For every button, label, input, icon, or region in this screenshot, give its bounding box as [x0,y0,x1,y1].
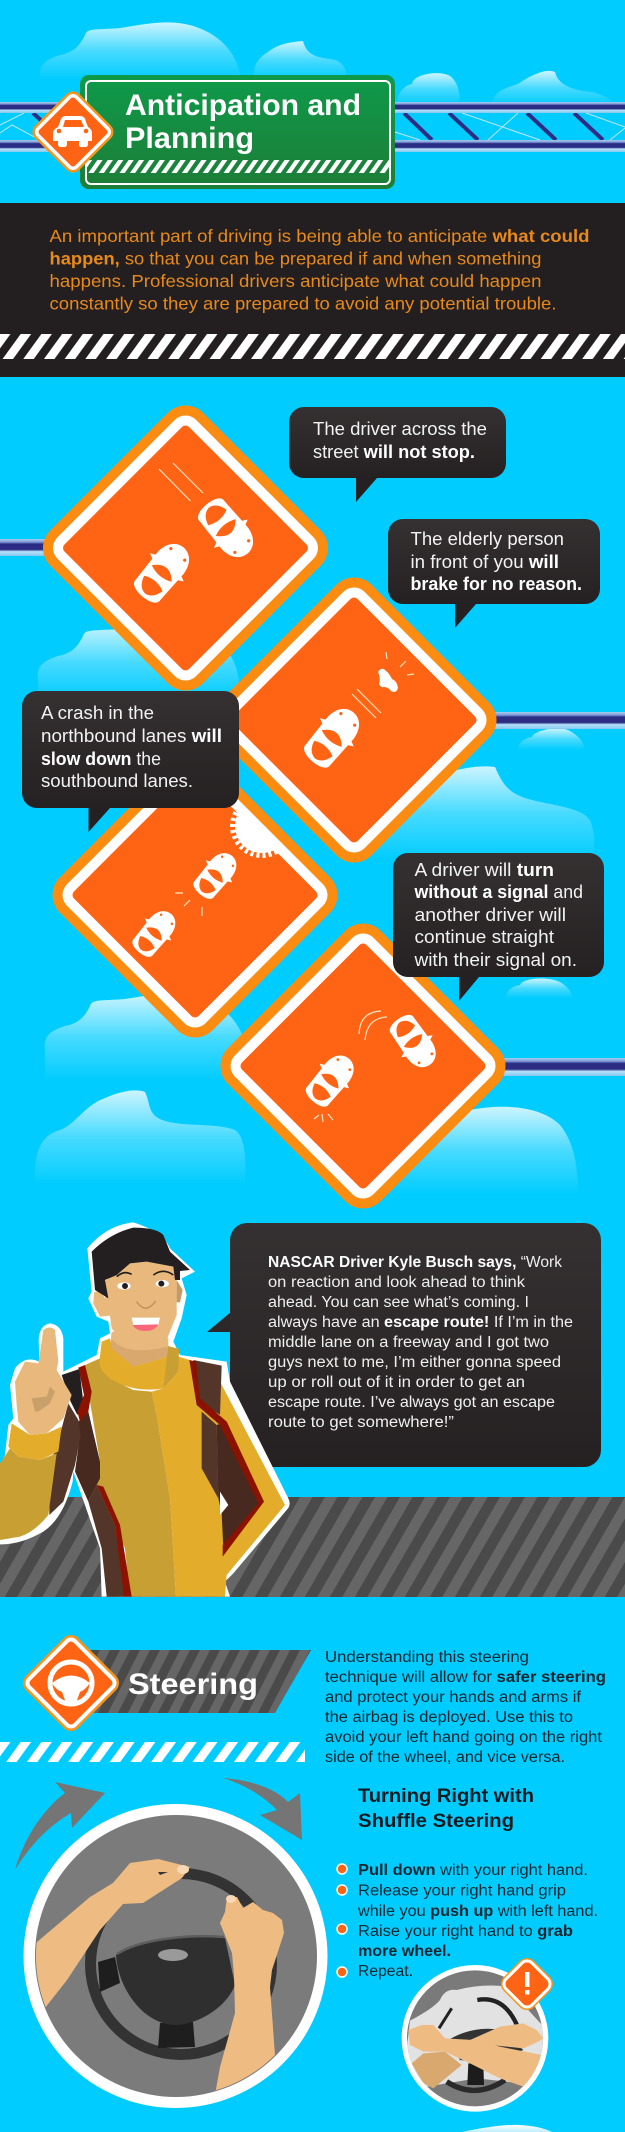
spokes [98,1957,195,2048]
steering heading: Steering [128,1668,258,1701]
truss gantry [0,102,625,152]
highway sign: title [80,75,395,189]
bubble 4: continue straight [414,927,554,947]
quote text: escape route. I’ve always got an escape [268,1394,555,1411]
speed lines [159,463,203,501]
light dashboard [405,1986,547,2087]
bubble 3: northbound lanes will [41,726,222,746]
gantry stubs [0,539,625,1076]
sign 3: crash [78,778,312,1012]
quote text [268,1254,573,1431]
steering intro text: Understanding this steering [325,1649,529,1666]
arrow: right curved [223,1778,302,1840]
hub [116,1937,235,2025]
bubble 3 [22,691,239,832]
bubble 4: with their signal on. [413,950,577,970]
steering intro text: avoid your left hand going on the right [325,1729,603,1746]
bubble 4: without a signal and [414,882,583,902]
icon: warning diamond [511,1968,543,2000]
quote text: guys next to me, I’m either gonna speed [268,1354,561,1371]
banner [90,1650,311,1713]
bubble 4: A driver will turn [414,860,554,880]
icon: car B [298,1046,364,1114]
face features [117,1271,173,1331]
bullet text: Repeat. [358,1963,413,1980]
bubble 4 [393,853,604,1001]
vest right [193,1360,222,1415]
diamond [33,1645,109,1721]
white silhouette [0,1222,290,1597]
wheel rim [90,1874,272,2054]
bullet text: Release your right hand grip [358,1882,566,1900]
quote text: NASCAR Driver Kyle Busch says, “Work [268,1254,562,1271]
bubble 1: street will not stop. [313,442,475,462]
rim arcs [477,1999,518,2028]
bullet text [357,1862,598,1980]
bubble 2: brake for no reason. [410,574,582,594]
icon: car A [187,845,245,905]
title text: Anticipation and [125,89,361,122]
intro text: happen, so that you can be prepared if and when something [50,248,542,268]
turn arcs and rays [314,1011,387,1122]
icon: car B [126,533,200,611]
sign 4: no signal [246,948,480,1184]
cloud at page bottom [462,2125,552,2132]
intro text: constantly so they are prepared to avoid any potential trouble. [50,294,556,314]
asphalt band [0,1497,625,1597]
title text second line: Planning [125,122,254,155]
bubble 2: in front of you will [410,552,559,572]
intro text: happens. Professional drivers anticipate what could happen [50,271,542,291]
intro text [50,226,590,314]
quote text: middle lane on a freeway and I got two [268,1334,549,1351]
cap [92,1228,190,1298]
neck [110,1332,168,1367]
steering intro text: the airbag is deployed. Use this to [325,1709,573,1726]
bubble 4: another driver will [414,905,566,925]
driver character [0,1222,290,1597]
bubble 1: The driver across the [313,419,487,439]
intro band [0,203,625,377]
stripes under heading [0,1742,305,1762]
quote text: always have an escape route! If I’m in the [268,1314,573,1331]
raised hand and sleeve [0,1448,57,1540]
brake rays [352,652,414,718]
icon: car diamond [42,100,104,164]
bullet text: more wheel. [358,1943,451,1960]
left arm [30,1859,190,2008]
small crossed arms illustration [402,1965,548,2112]
quote text: ahead. You can see what’s coming. I [268,1294,529,1311]
collar [99,1338,178,1390]
clouds top [40,22,614,105]
bubble 3: slow down the [41,749,161,769]
jacket right torso and arm [152,1357,285,1597]
subheading: Shuffle Steering [358,1811,514,1832]
crash burst [230,811,278,858]
icon: steering diamond + banner [33,1645,311,1721]
bubble 3: A crash in the [41,703,154,723]
bullet text: while you push up with left hand. [357,1903,598,1920]
rays [175,893,202,916]
quote text: on reaction and look ahead to think [268,1274,525,1291]
quote text: up or roll out of it in order to get an [268,1374,525,1391]
sign 2: elderly braking [236,602,472,838]
jacket left torso [85,1358,176,1597]
clouds middle [35,623,594,1195]
subheading [358,1786,534,1832]
bubble 3: southbound lanes. [41,771,193,791]
steering intro text [325,1649,606,1766]
bubble 2 [388,519,600,628]
vest left [62,1369,83,1415]
steering intro text: side of the wheel, and vice versa. [325,1749,565,1766]
icon: car A [190,490,264,568]
icon: car [296,698,370,776]
bullet text: Raise your right hand to grab [358,1923,573,1940]
right arm [214,1897,284,2100]
large steering wheel illustration [24,1804,328,2108]
bubble 2: The elderly person [410,529,564,549]
bullet text: Pull down with your right hand. [358,1862,588,1879]
arrow: left curved [15,1782,105,1870]
steering intro text: technique will allow for safer steering [325,1669,606,1686]
icon: car A [382,1008,446,1076]
sign 1: driver will not stop [68,430,303,666]
quote bubble [207,1223,601,1467]
subheading: Turning Right with [358,1786,534,1807]
hub [448,2029,523,2063]
intro text: An important part of driving is being able to anticipate what could [50,226,590,246]
bullet dots [337,1864,347,1977]
icon: car B [126,903,184,963]
bubble 1 [289,407,506,502]
arms [412,2052,462,2088]
icon: braking car ahead [378,669,398,692]
face [93,1262,177,1350]
quote text: route to get somewhere!” [268,1414,454,1431]
steering intro text: and protect your hands and arms if [325,1689,582,1706]
wheel icon [50,1662,92,1704]
